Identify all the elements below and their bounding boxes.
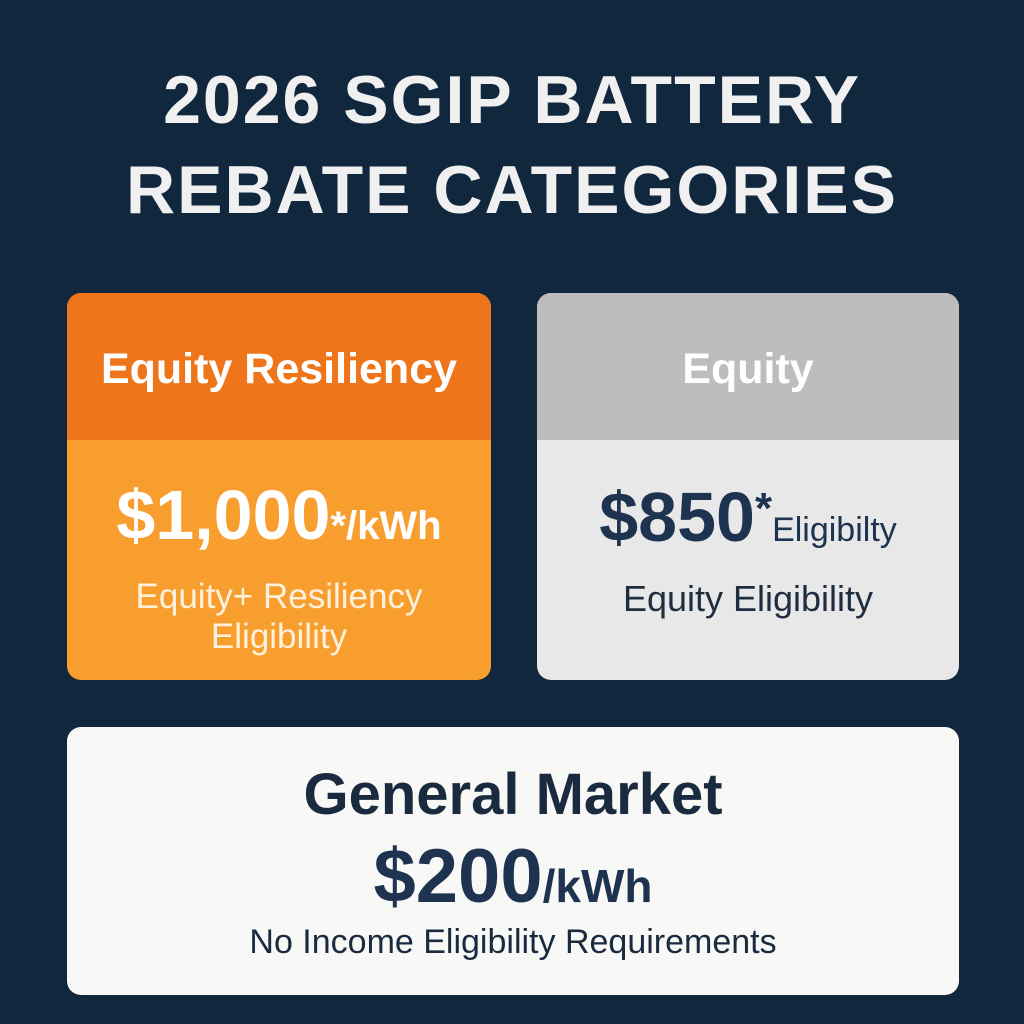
panel: general market bbox=[67, 727, 959, 995]
header: equity resiliency bbox=[67, 293, 491, 440]
price: $200/kWh: $200/kWh bbox=[374, 834, 652, 919]
price: $1,000/kWh: $1,000*/kWh bbox=[116, 476, 442, 554]
requirements text: No Income Eligibility Requirements bbox=[249, 923, 777, 961]
title: 2026 SGIP BATTERY bbox=[163, 62, 861, 138]
eligibility text bbox=[136, 577, 422, 656]
header: equity: Equity bbox=[682, 345, 814, 393]
header: equity bbox=[537, 293, 959, 440]
heading: general market: General Market bbox=[303, 762, 723, 827]
eligibility text: Equity+ Resiliency bbox=[136, 577, 422, 616]
title bbox=[126, 62, 898, 228]
header: equity resiliency: Equity Resiliency bbox=[101, 345, 457, 393]
panel: equity resiliency bbox=[67, 293, 491, 680]
eligibility text: Eligibility bbox=[211, 617, 347, 656]
title: REBATE CATEGORIES bbox=[126, 152, 898, 228]
price: $850: $850*Eligibilty bbox=[599, 478, 897, 556]
eligibility text: Equity Eligibility bbox=[623, 578, 873, 619]
panel: equity bbox=[537, 293, 959, 680]
